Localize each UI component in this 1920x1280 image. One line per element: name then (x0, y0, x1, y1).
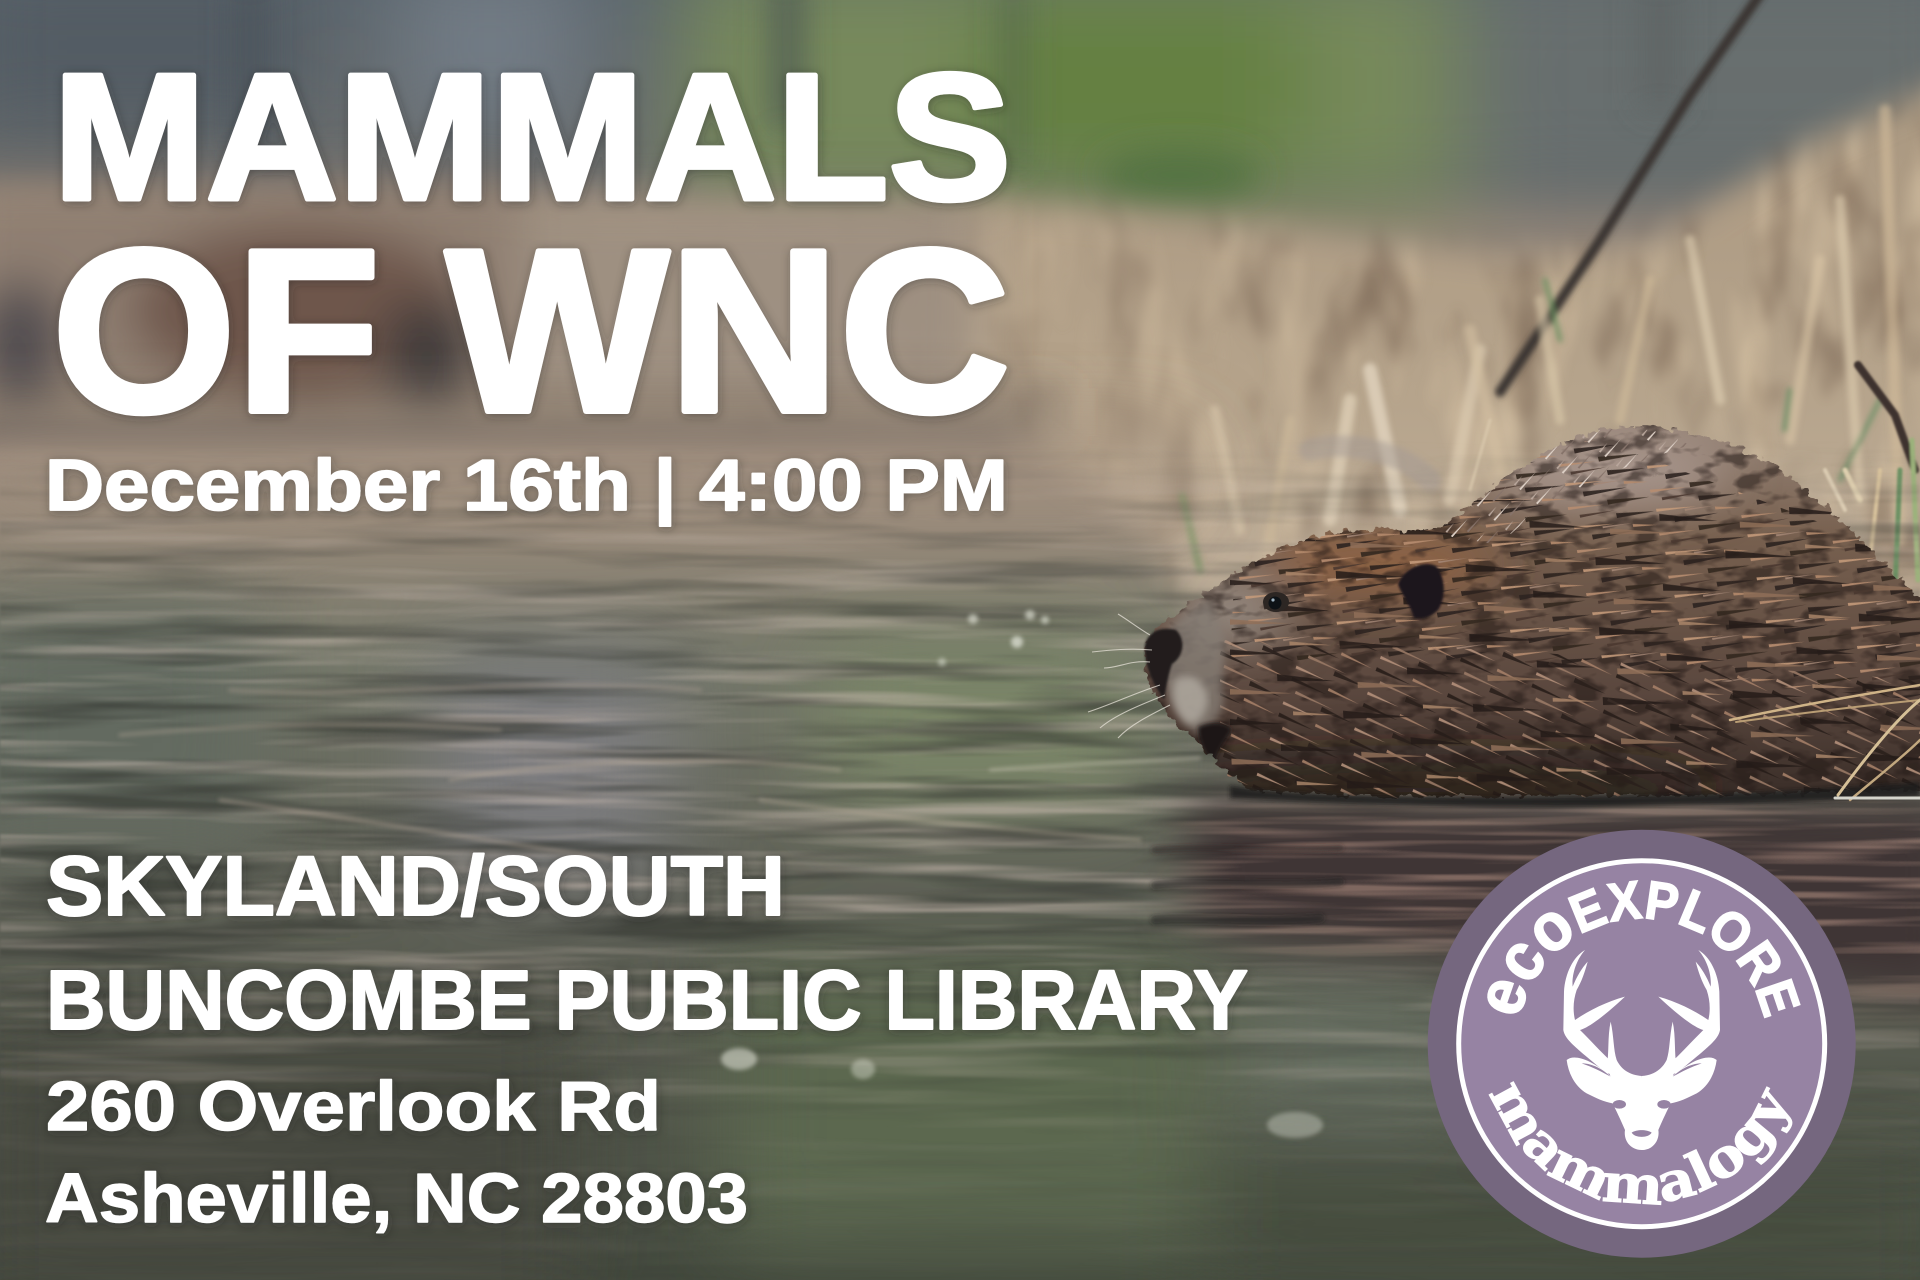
water colour fields (0, 450, 1920, 1280)
ear inner line left (1582, 1063, 1611, 1077)
deer eyes (1613, 1100, 1671, 1109)
blurred forest backdrop (0, 0, 1920, 210)
title line 2: OF WNC (52, 202, 1010, 461)
venue name (46, 839, 1248, 1047)
title line 1: MAMMALS (53, 37, 1011, 238)
badge text bottom: mammalogy (1488, 1081, 1792, 1206)
right antler (1650, 950, 1720, 1077)
beaver reflection in water (1163, 774, 1920, 1015)
beaver nose (1145, 629, 1182, 700)
city state zip: Asheville, NC 28803 (45, 1159, 748, 1237)
ear inner line right (1673, 1063, 1702, 1077)
venue line 2: BUNCOMBE PUBLIC LIBRARY (46, 953, 1248, 1047)
blurred far bank (0, 40, 1920, 640)
beaver ear (1398, 564, 1444, 619)
deer head (1567, 1057, 1717, 1150)
beaver chin (1198, 723, 1232, 764)
beaver eye (1263, 592, 1289, 612)
left antler (1563, 950, 1633, 1077)
water line under beaver (1230, 782, 1920, 806)
badge outer circle (1428, 830, 1856, 1258)
venue line 1: SKYLAND/SOUTH (46, 839, 785, 933)
badge text top: ecoEXPLORE (1487, 880, 1801, 1018)
address (45, 1067, 748, 1237)
badge: ecoEXPLORE mammalogy (1428, 830, 1856, 1258)
icon: deer head with antlers (1563, 950, 1720, 1150)
beaver whiskers (1088, 614, 1170, 738)
badge inner circle (1459, 861, 1825, 1227)
foreground dry stems (1730, 685, 1920, 800)
date and time: December 16th | 4:00 PM (45, 446, 1008, 526)
beaver (1088, 420, 1920, 818)
water ripples (0, 460, 1920, 1193)
street address: 260 Overlook Rd (46, 1067, 661, 1145)
deer nose (1632, 1130, 1652, 1137)
beaver body with fur (1120, 420, 1920, 818)
beaver muzzle (1160, 600, 1225, 735)
title (52, 37, 1011, 461)
reeds and dry grass (1182, 0, 1900, 570)
water bubbles and highlights (721, 610, 1323, 1138)
